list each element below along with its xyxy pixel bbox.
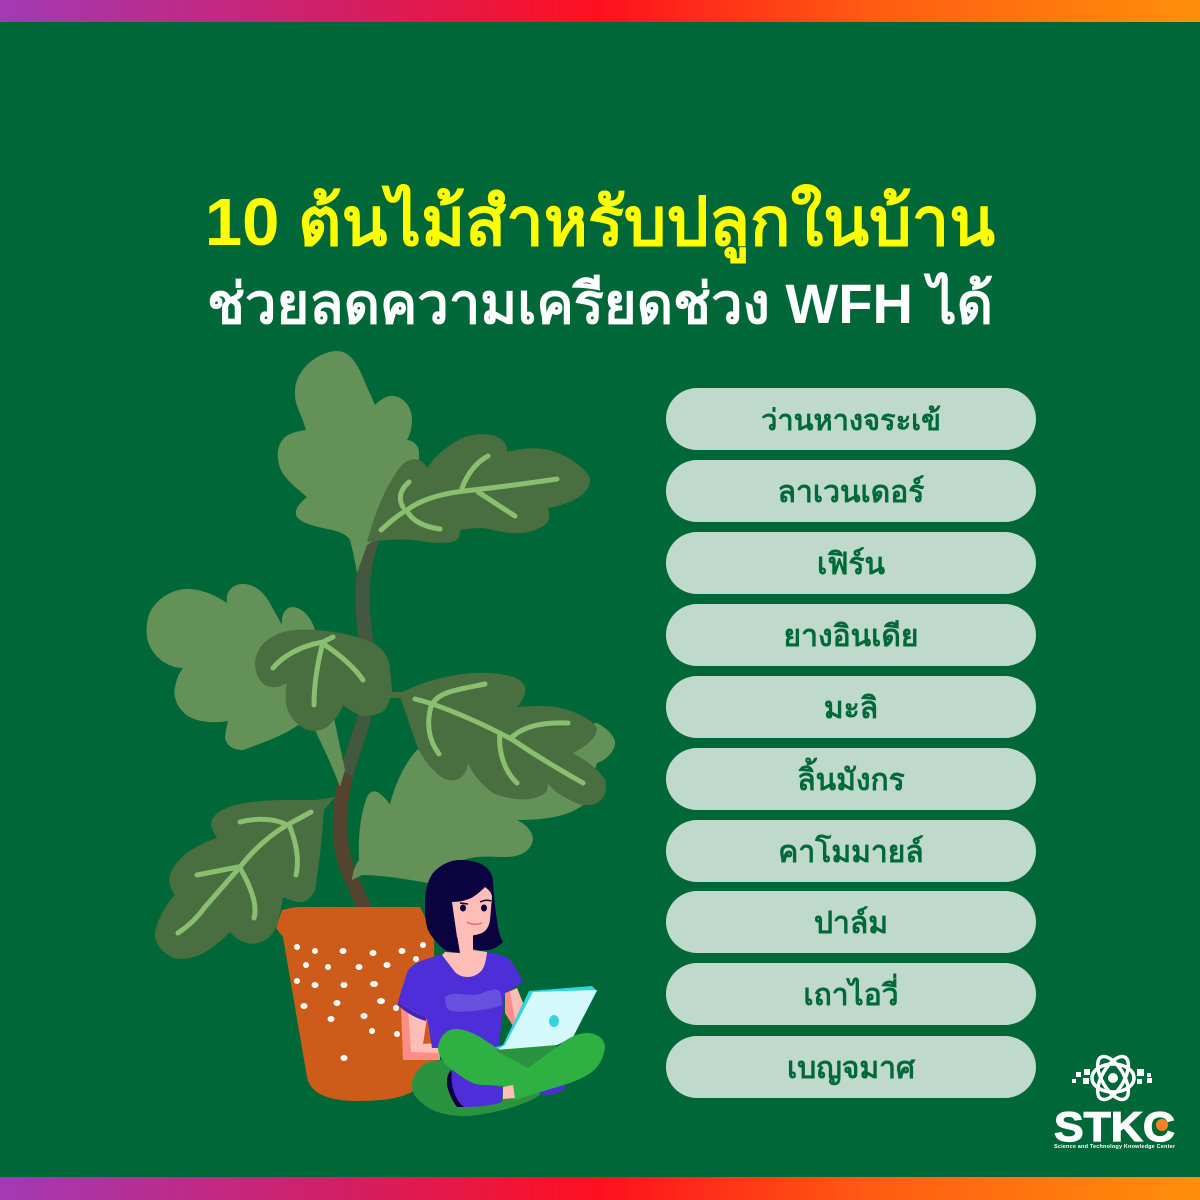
list item 3 <box>666 532 1036 594</box>
list item 5 <box>666 676 1036 738</box>
woman: left arm <box>401 1007 440 1060</box>
woman: neck and chest <box>442 935 487 977</box>
woman: far foot <box>535 1085 567 1095</box>
woman: right arm <box>505 988 523 1026</box>
list item 8 <box>666 891 1036 953</box>
list item 2: ลาเวนเดอร์ <box>778 476 924 509</box>
list item 1: ว่านหางจระเข้ <box>761 405 941 437</box>
top gradient band <box>0 0 1200 22</box>
pot dots <box>294 942 426 1061</box>
leaf: top light <box>278 351 419 573</box>
leaf: mid dark heart <box>255 630 392 731</box>
woman with laptop <box>398 860 605 1116</box>
leaf: lower left dark <box>155 797 335 959</box>
leaf: top dark <box>367 434 590 543</box>
list item 8: ปาล์ม <box>814 907 888 940</box>
list item 10 <box>666 1036 1036 1098</box>
logo pixel squares <box>1072 1069 1152 1084</box>
list item 6: ลิ้นมังกร <box>797 764 905 797</box>
logo atom icon <box>1091 1052 1135 1104</box>
woman: crossed legs <box>438 1029 605 1100</box>
woman: near foot <box>447 1070 465 1107</box>
logo orange dot <box>1156 1119 1168 1131</box>
list item 9: เถาไอวี่ <box>803 979 899 1012</box>
woman: dark leg fold <box>495 1045 557 1068</box>
list item 2 <box>666 460 1036 522</box>
logo: STKC <box>1054 1052 1176 1150</box>
list item 7: คาโมมายล์ <box>778 836 924 869</box>
list item 6 <box>666 748 1036 810</box>
list item 10: เบญจมาศ <box>787 1052 915 1085</box>
list item 4: ยางอินเดีย <box>784 620 918 653</box>
logo wordmark: STKC <box>1054 1103 1175 1150</box>
leaf: right dark <box>388 673 606 805</box>
subtitle: ช่วยลดความเครียดช่วง WFH ได้ <box>207 272 993 335</box>
woman: bare ankle <box>503 1085 515 1099</box>
list item 7 <box>666 820 1036 882</box>
logo tagline: Science and Technology Knowledge Center <box>1054 1144 1176 1150</box>
leaf: right light lower <box>352 723 615 885</box>
woman: face <box>452 887 492 937</box>
woman: eyes and mouth <box>460 900 491 924</box>
woman: shirt <box>398 952 523 1048</box>
list item 1 <box>666 388 1036 450</box>
list item 5: มะลิ <box>824 692 878 725</box>
woman: hair <box>425 860 503 953</box>
list item 9 <box>666 963 1036 1025</box>
list item 4 <box>666 604 1036 666</box>
woman: seat and back leg <box>412 1045 557 1116</box>
plant stem <box>340 543 371 908</box>
list item 3: เฟิร์น <box>817 548 885 581</box>
title: 10 ต้นไม้สำหรับปลูกในบ้าน <box>205 185 995 260</box>
bottom gradient band <box>0 1177 1200 1200</box>
laptop <box>493 986 597 1052</box>
pot <box>276 907 436 1101</box>
leaf: left light <box>146 584 345 787</box>
